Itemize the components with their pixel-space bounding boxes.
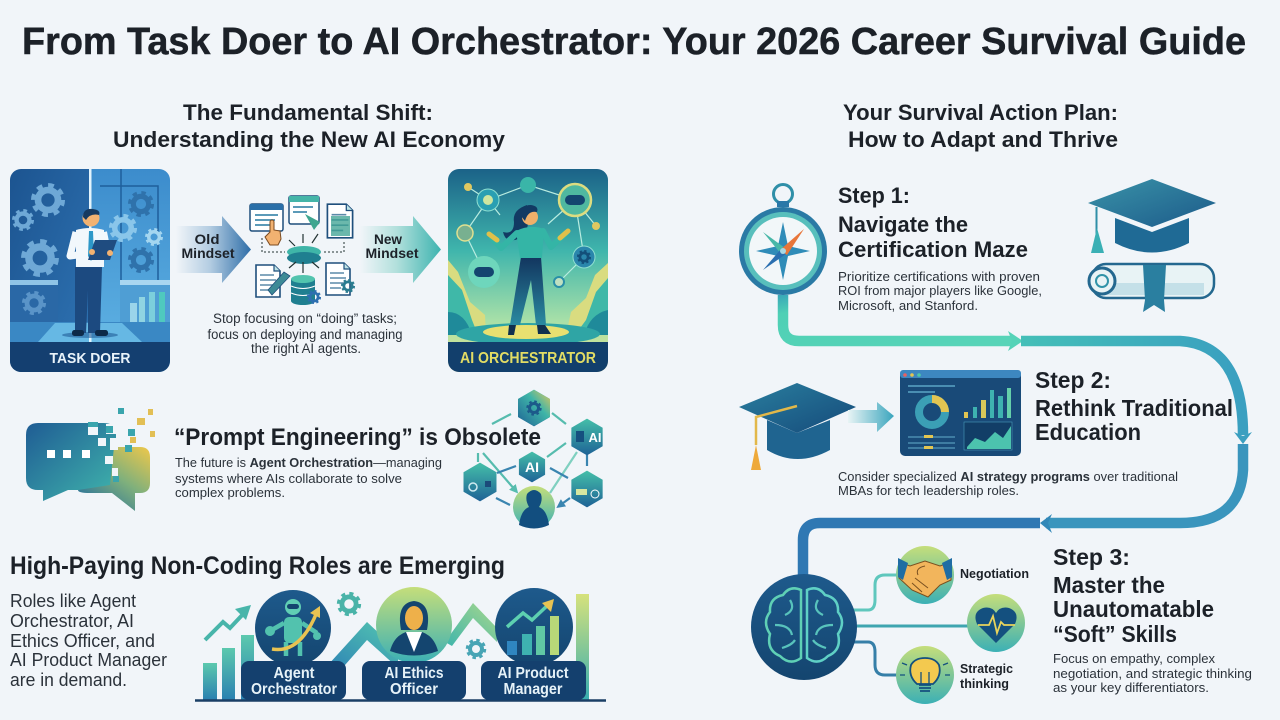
- text: step 1: Microsoft, and Stanford.: [838, 299, 978, 313]
- icon: dissolving chat bubbles: [26, 408, 155, 511]
- icon: brain: [751, 574, 857, 680]
- label: ai product manager: Manager: [504, 681, 562, 698]
- heading: high-paying roles: High-Paying Non-Coding Roles are Emerging: [10, 552, 505, 580]
- panel: high-paying roles: [10, 552, 606, 700]
- card: ai orchestrator: AI ORCHESTRATOR: [460, 350, 596, 367]
- card: ai orchestrator: [448, 169, 608, 372]
- text: step 1: Step 1:: [838, 183, 910, 208]
- label: agent orchestrator: Agent: [274, 665, 314, 682]
- icon: agent robot: [255, 590, 331, 666]
- text: step 2 heading: Rethink Traditional: [1035, 395, 1233, 421]
- heading: action plan: How to Adapt and Thrive: [848, 127, 1118, 152]
- icon: heart: [967, 594, 1025, 652]
- icon: handshake: [896, 546, 954, 604]
- icon: compass: [739, 184, 827, 295]
- heading: fundamental shift: [113, 100, 505, 152]
- heading: fundamental shift: The Fundamental Shift:: [183, 100, 433, 125]
- text: stop focusing: the right AI agents.: [251, 341, 361, 356]
- card: task doer: TASK DOER: [50, 350, 131, 367]
- text: roles in demand: Ethics Officer, and: [10, 631, 155, 651]
- connectors: brain to skills: [850, 575, 968, 675]
- text: step 3: as your key differentiators.: [1053, 681, 1209, 695]
- diagram: agent network: [464, 390, 603, 528]
- text: agent orchestration: The future is Agent Orchestration—managing: [175, 455, 442, 470]
- label: agent orchestrator: Orchestrator: [251, 681, 337, 698]
- text: step 1: [838, 183, 1042, 313]
- chart: role growth illustration: [195, 587, 606, 700]
- text: step 3: negotiation, and strategic thinking: [1053, 667, 1252, 681]
- arrow: old mindset: Mindset: [182, 246, 235, 261]
- heading: action plan: [843, 100, 1118, 152]
- text: agent orchestration: systems where AIs collaborate to solve: [175, 471, 402, 486]
- text: step 3: “Soft” Skills: [1053, 621, 1177, 647]
- card: task doer: [10, 169, 170, 372]
- text: step 3: Focus on empathy, complex: [1053, 652, 1216, 666]
- text: step 2 heading: [1035, 367, 1233, 445]
- panel: the fundamental shift: [10, 100, 608, 372]
- icon: lightbulb: [896, 646, 954, 704]
- diagram: agent network: AI: [588, 430, 602, 445]
- label: ai ethics officer: Officer: [390, 681, 438, 698]
- text: roles in demand: Roles like Agent: [10, 591, 136, 611]
- text: stop focusing: [208, 311, 402, 356]
- diagram: agent network: AI: [525, 459, 539, 475]
- heading: fundamental shift: Understanding the New AI Economy: [113, 127, 505, 152]
- label: strategic thinking: Strategic: [960, 662, 1013, 676]
- heading: action plan: Your Survival Action Plan:: [843, 100, 1118, 125]
- text: step 2 description: [838, 469, 1178, 498]
- text: step 3: Master the: [1053, 572, 1165, 598]
- arrow: new mindset: Mindset: [366, 246, 419, 261]
- icon: tasks cluster: [250, 196, 354, 305]
- text: step 2 heading: Education: [1035, 419, 1141, 445]
- label: agent orchestrator: [241, 661, 346, 700]
- text: roles in demand: AI Product Manager: [10, 650, 167, 670]
- text: stop focusing: focus on deploying and managing: [208, 327, 402, 342]
- text: step 3: [1053, 544, 1252, 695]
- icon: ethics officer: [376, 587, 452, 663]
- text: step 2 heading: Step 2:: [1035, 367, 1111, 393]
- icon: product manager: [495, 588, 573, 666]
- text: step 1: Prioritize certifications with proven: [838, 270, 1040, 284]
- arrow: path from step 1 to step 2: [783, 295, 1252, 444]
- text: agent orchestration: [175, 455, 442, 500]
- arrow: old mindset: [176, 216, 251, 283]
- label: ai product manager: AI Product: [498, 665, 568, 682]
- label: ai ethics officer: AI Ethics: [384, 665, 444, 682]
- text: roles in demand: [10, 591, 167, 690]
- heading: prompt engineering: “Prompt Engineering” is Obsolete: [174, 424, 541, 451]
- text: step 1: ROI from major players like Google,: [838, 284, 1042, 298]
- label: negotiation: Negotiation: [960, 567, 1029, 581]
- text: step 1: Certification Maze: [838, 237, 1028, 262]
- text: agent orchestration: complex problems.: [175, 485, 285, 500]
- panel: prompt engineering obsolete: [26, 390, 603, 528]
- text: step 2 description: MBAs for tech leadership roles.: [838, 483, 1019, 498]
- panel: survival action plan: [739, 100, 1252, 704]
- arrow: new mindset: New: [374, 232, 402, 247]
- text: step 1: Navigate the: [838, 212, 968, 237]
- label: strategic thinking: [960, 662, 1013, 691]
- label: ai ethics officer: [362, 661, 466, 700]
- label: ai product manager: [481, 661, 586, 700]
- icon: graduation cap and diploma: [1088, 179, 1216, 312]
- title: From Task Doer to AI Orchestrator: Your 2026 Career Survival Guide: [22, 21, 1246, 63]
- text: step 2 description: Consider specialized AI strategy programs over traditional: [838, 469, 1178, 484]
- icon: graduation cap to dashboard: [739, 370, 1021, 470]
- text: roles in demand: are in demand.: [10, 670, 127, 690]
- label: strategic thinking: thinking: [960, 677, 1009, 691]
- figure: woman: [489, 205, 568, 335]
- arrow: new mindset: [360, 216, 441, 283]
- text: stop focusing: Stop focusing on “doing” tasks;: [213, 311, 397, 326]
- figure: man with tablet: [62, 209, 118, 338]
- text: step 3: Unautomatable: [1053, 596, 1214, 622]
- text: roles in demand: Orchestrator, AI: [10, 611, 134, 631]
- arrow: path from step 2 to step 3: [803, 444, 1243, 575]
- chart: dashboard: [900, 370, 1021, 456]
- text: step 3: Step 3:: [1053, 544, 1130, 570]
- arrow: old mindset: Old: [194, 232, 220, 247]
